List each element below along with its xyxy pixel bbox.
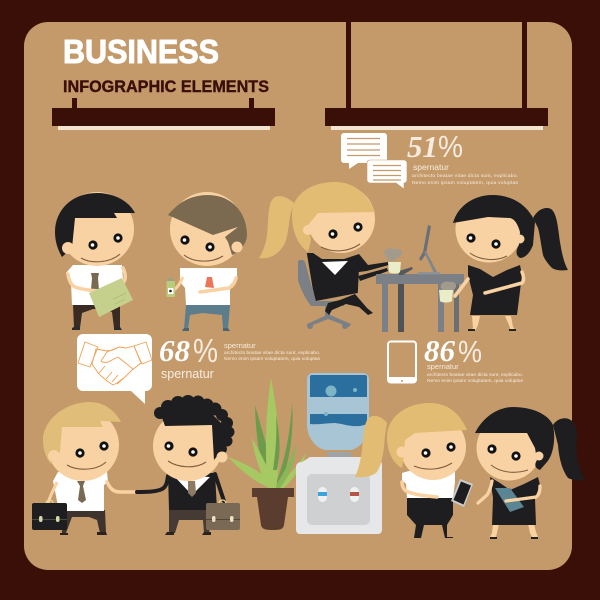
stat: 51%: architecto beatae vitae dicta sunt, explicabo. <box>412 173 518 179</box>
stat: 86%: architecto beatae vitae dicta sunt, explicabo. <box>427 372 523 378</box>
character: seated blonde woman with chair <box>259 182 389 329</box>
stat: 51% <box>407 129 519 186</box>
water taps <box>318 487 359 502</box>
title: INFOGRAPHIC ELEMENTS <box>63 78 269 96</box>
black briefcase <box>32 500 67 530</box>
stat: 51%: 51 <box>407 129 438 164</box>
character: man with coffee <box>166 192 247 331</box>
office desk with monitor <box>376 225 464 332</box>
curly hair <box>154 395 234 460</box>
stat: 68%: spernatur <box>224 341 256 350</box>
smartphone <box>451 479 473 507</box>
stat: 51%: % <box>438 129 463 164</box>
character: curly-haired man with brown briefcase <box>137 395 240 535</box>
stat: 86%: Nemo enim ipsam voluptatem, quia voluptas <box>427 378 524 384</box>
left hanging shelf <box>52 98 275 130</box>
stat: 68%: % <box>193 332 218 369</box>
character: man with folder <box>55 192 135 330</box>
title: BUSINESS <box>63 33 219 70</box>
stat: 51%: spernatur <box>413 162 449 172</box>
icon: chat bubbles <box>341 133 407 189</box>
stat: 86% <box>424 333 524 384</box>
character: blonde man with black briefcase <box>32 402 135 535</box>
coffee cup on desk <box>384 248 402 274</box>
character: dark-haired woman with tablet <box>475 407 585 539</box>
stat: 86%: % <box>458 334 482 369</box>
icon: tablet <box>388 342 416 383</box>
stat: 51%: Nemo enim ipsam voluptatem, quia voluptas <box>412 180 519 186</box>
title <box>63 33 269 96</box>
water cooler <box>296 373 382 534</box>
stat: 68%: Nemo enim ipsam voluptatem, quia voluptas <box>224 356 321 362</box>
water bottle <box>307 373 369 450</box>
stat: 68%: 68 <box>159 333 190 368</box>
stat: 68%: spernatur <box>161 367 214 381</box>
potted plant <box>228 378 306 530</box>
stat: 68%: architecto beatae vitae dicta sunt, explicabo. <box>224 350 320 356</box>
stat: 86%: 86 <box>424 333 456 368</box>
brown briefcase <box>206 500 240 530</box>
character: blonde woman with phone <box>355 403 473 538</box>
handshake line art <box>78 342 152 385</box>
icon: handshake speech bubble <box>77 334 152 404</box>
stat: 86%: spernatur <box>427 362 459 371</box>
character: woman in black dress with cup <box>453 195 568 331</box>
stat: 68% <box>159 332 321 381</box>
right hanging shelf <box>325 22 548 130</box>
office chair <box>298 260 351 329</box>
coffee cup in hand <box>439 281 456 302</box>
